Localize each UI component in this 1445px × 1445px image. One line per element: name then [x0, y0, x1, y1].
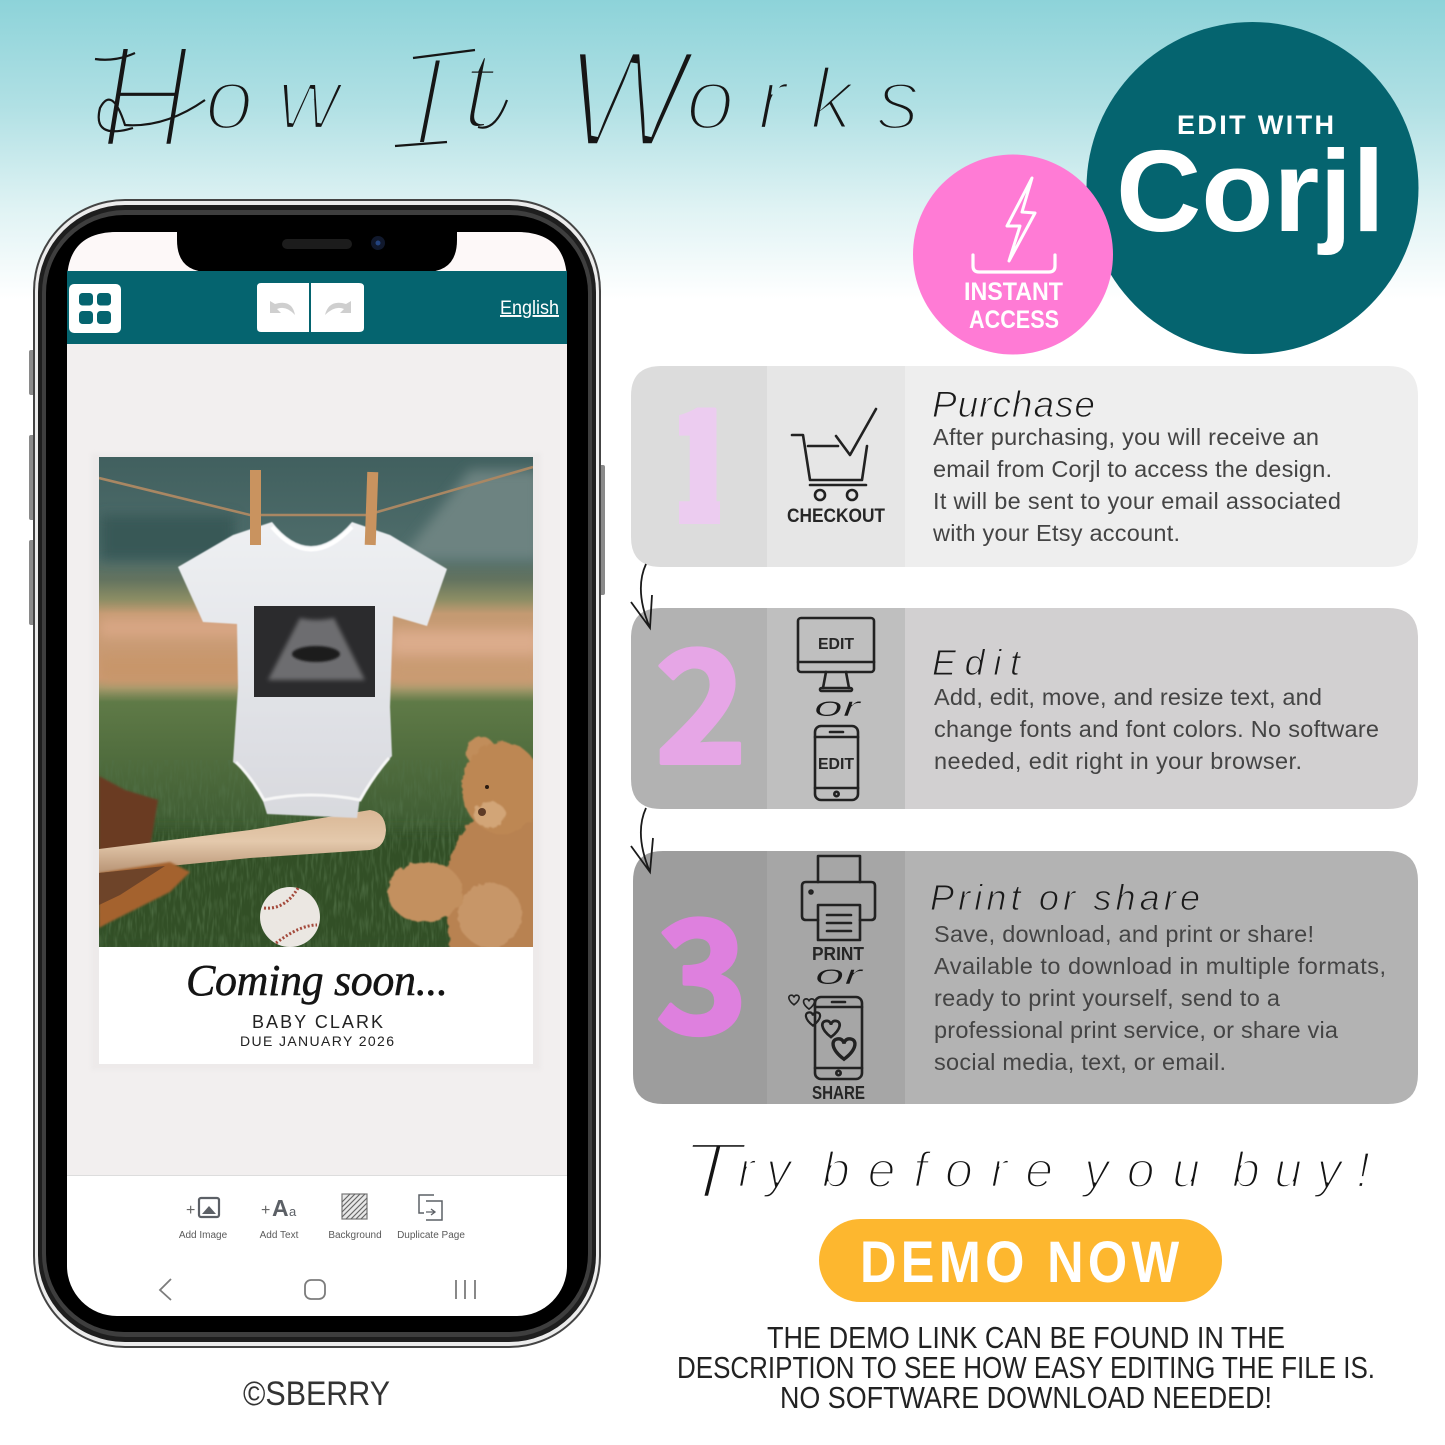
tool: add text	[260, 1195, 299, 1241]
editor top bar	[67, 271, 567, 344]
tool: add image	[179, 1198, 228, 1241]
title: How It Works: orks	[686, 51, 920, 148]
arrow: step 1 to step 2	[631, 564, 652, 628]
heading: try before you buy: T	[680, 1126, 749, 1215]
text: step 1 body	[932, 424, 1341, 546]
text: step 3 body: ready to print yourself, send to a	[934, 985, 1281, 1011]
card caption: Coming soon: Coming soon...	[186, 956, 448, 1005]
title: How It Works: H	[100, 12, 191, 180]
tool: duplicate page: Duplicate Page	[397, 1230, 465, 1241]
tool: add text: Add Text	[260, 1230, 299, 1241]
text: step 1 body: email from Corjl to access the design.	[933, 456, 1332, 482]
rope	[99, 467, 533, 515]
badge: Edit with Corjl	[1086, 22, 1418, 354]
android navigation	[160, 1279, 475, 1300]
editor toolbar	[160, 1194, 475, 1300]
arrow: step 2 to step 3	[631, 808, 653, 872]
badge: Instant Access: ACCESS	[969, 306, 1059, 334]
label: or: or	[814, 691, 863, 722]
number 2: 2	[655, 582, 747, 808]
photo: baseball onesie scene	[99, 457, 545, 950]
baseball	[260, 887, 320, 947]
heading: try before you buy: before	[822, 1142, 1053, 1198]
badge: Edit with Corjl: EDIT WITH	[1177, 110, 1334, 140]
icon: printer	[802, 856, 875, 940]
teddy bear	[387, 737, 545, 950]
title: How It Works: W	[565, 20, 698, 177]
card caption: due date: DUE JANUARY 2026	[240, 1033, 394, 1049]
heading: try before you buy	[680, 1126, 1370, 1215]
tool: add text: a	[289, 1204, 297, 1219]
label: print: PRINT	[812, 944, 864, 964]
text: step 1 body: with your Etsy account.	[932, 520, 1180, 546]
text: step 3 body	[934, 921, 1386, 1075]
icon: phone edit: EDIT	[818, 756, 854, 773]
panel: step 3 print or share	[633, 851, 1418, 1104]
heading: try before you buy: buy!	[1232, 1142, 1370, 1198]
text: demo note	[677, 1320, 1375, 1415]
button: demo now: DEMO NOW	[860, 1230, 1184, 1295]
design card with photo	[91, 453, 545, 1070]
text: step 3 body: social media, text, or email.	[934, 1049, 1226, 1075]
tool: background	[328, 1194, 382, 1241]
phone screen	[67, 232, 567, 1316]
title: How It Works: t	[462, 27, 497, 152]
text: step 3 body: professional print service, or share via	[934, 1017, 1339, 1043]
heading: purchase: Purchase	[932, 384, 1095, 425]
text: step 3 body: Save, download, and print or share!	[934, 921, 1314, 947]
copyright: ©SBERRY	[243, 1375, 390, 1413]
number 1: 1	[654, 341, 746, 567]
title: How It Works: I	[410, 28, 446, 174]
phone mockup	[29, 199, 605, 1348]
button: demo now	[819, 1219, 1222, 1302]
panel: step 2 edit	[631, 582, 1418, 809]
text: step 2 body: change fonts and font colors. No software	[934, 716, 1379, 742]
glove lower	[99, 862, 190, 928]
text: step 2 body: needed, edit right in your browser.	[934, 748, 1302, 774]
text: demo note: THE DEMO LINK CAN BE FOUND IN THE	[767, 1320, 1285, 1355]
heading: print or share: Print or share	[930, 877, 1200, 918]
label: share: SHARE	[812, 1083, 865, 1103]
heading: try before you buy: ry	[738, 1142, 794, 1198]
card caption: Baby Clark: BABY CLARK	[252, 1012, 383, 1032]
badge: Instant Access: INSTANT	[964, 278, 1063, 306]
title: How It Works: ow	[205, 51, 345, 148]
text: step 3 body: Available to download in multiple formats,	[934, 953, 1386, 979]
tool: add text: +	[261, 1202, 270, 1219]
tool: add image: Add Image	[179, 1230, 228, 1241]
text: demo note: NO SOFTWARE DOWNLOAD NEEDED!	[780, 1380, 1272, 1415]
ultrasound	[254, 606, 375, 697]
icon: phone with hearts	[789, 995, 862, 1079]
text: step 1 body: After purchasing, you will receive an	[933, 424, 1319, 450]
icon: desktop monitor edit	[798, 618, 874, 691]
badge: Edit with Corjl: Corjl	[1116, 126, 1385, 256]
heading: try before you buy: you	[1081, 1142, 1200, 1198]
text: step 1 body: It will be sent to your email associated	[933, 488, 1341, 514]
text: step 2 body	[934, 684, 1379, 774]
icon: template grid	[69, 284, 121, 333]
bat	[99, 810, 386, 873]
icon: undo and redo buttons	[257, 283, 364, 332]
tool: duplicate page	[397, 1195, 465, 1241]
text: step 2 body: Add, edit, move, and resize text, and	[934, 684, 1322, 710]
language link: English	[500, 297, 559, 319]
tool: background: Background	[328, 1230, 382, 1241]
title: How It Works	[95, 12, 920, 180]
label: checkout: CHECKOUT	[787, 506, 885, 527]
notch	[177, 225, 457, 272]
badge: Instant Access	[913, 154, 1113, 354]
tool: add text: A	[272, 1195, 289, 1221]
clothes pegs	[250, 470, 261, 545]
icon: checkout cart	[792, 409, 876, 500]
panel: step 1 purchase	[631, 366, 1418, 567]
label: or: or	[815, 959, 865, 990]
onesie	[178, 522, 447, 818]
tool: add image: +	[186, 1202, 195, 1219]
glove upper	[99, 776, 158, 856]
icon: desktop monitor edit: EDIT	[818, 636, 854, 653]
number 3: 3	[656, 852, 748, 1078]
icon: phone edit	[815, 726, 858, 800]
heading: edit: Edit	[932, 642, 1022, 683]
